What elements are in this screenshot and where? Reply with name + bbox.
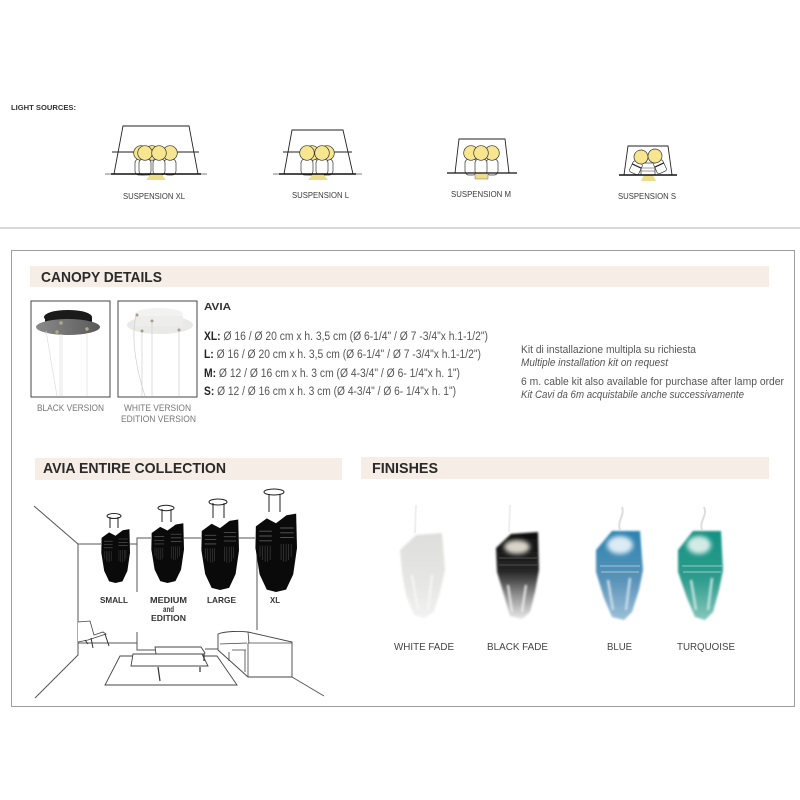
photo: white canopy xyxy=(118,301,197,397)
heading: avia entire collection: AVIA ENTIRE COLLECTION xyxy=(43,460,226,477)
text: installation kit notes xyxy=(521,344,784,401)
text: installation kit notes: Kit di installazione multipla su richiesta xyxy=(521,344,697,356)
photo: black canopy xyxy=(31,301,110,397)
panel: product details xyxy=(12,250,794,706)
icon: suspension XL xyxy=(105,126,207,180)
icon: suspension S xyxy=(619,146,677,181)
heading: finishes xyxy=(361,457,769,479)
text: avia dimensions: AVIA xyxy=(204,301,231,313)
caption: white and edition version: WHITE VERSION xyxy=(124,403,191,413)
label: black fade: BLACK FADE xyxy=(487,641,548,653)
finish: white fade xyxy=(400,505,445,618)
chandelier: XL xyxy=(255,489,297,592)
room outline xyxy=(34,506,324,698)
illustration: room with collection xyxy=(34,489,324,698)
text: installation kit notes: Kit Cavi da 6m acquistabile anche successivamente xyxy=(521,389,744,401)
text: avia dimensions: XL: Ø 16 / Ø 20 cm x h. 3,5 cm (Ø 6-1/4" / Ø 7 -3/4"x h.1-1/2") xyxy=(204,331,488,343)
chandelier: medium xyxy=(151,505,184,583)
label: light sources: LIGHT SOURCES: xyxy=(11,105,76,112)
label: large: LARGE xyxy=(207,595,236,605)
label: medium and edition: EDITION xyxy=(151,613,186,623)
icon: suspension L xyxy=(273,130,362,180)
label: medium and edition: MEDIUM xyxy=(150,595,187,605)
label: medium and edition: and xyxy=(163,604,174,614)
heading: finishes: FINISHES xyxy=(372,460,438,477)
label: blue: BLUE xyxy=(607,641,632,653)
text: avia dimensions: S: Ø 12 / Ø 16 cm x h. 3 cm (Ø 4-3/4" / Ø 6- 1/4"x h. 1") xyxy=(204,386,456,398)
text: avia dimensions: M: Ø 12 / Ø 16 cm x h. 3 cm (Ø 4-3/4" / Ø 6- 1/4"x h. 1") xyxy=(204,368,460,380)
heading: canopy details: CANOPY DETAILS xyxy=(41,269,162,286)
label: small: SMALL xyxy=(100,595,128,605)
chandelier: small xyxy=(101,514,130,583)
label: suspension M: SUSPENSION M xyxy=(451,190,511,199)
label: turquoise: TURQUOISE xyxy=(677,641,735,653)
label: xl: XL xyxy=(270,595,280,605)
furniture: armchair xyxy=(78,621,109,648)
label: suspension L: SUSPENSION L xyxy=(292,191,350,200)
text: installation kit notes: Multiple installation kit on request xyxy=(521,357,669,369)
caption: black version: BLACK VERSION xyxy=(37,403,104,413)
text: avia dimensions xyxy=(204,301,488,398)
furniture: sofa xyxy=(218,631,292,677)
label: suspension XL: SUSPENSION XL xyxy=(123,192,186,201)
finish: turquoise xyxy=(678,507,723,620)
text: installation kit notes: 6 m. cable kit also available for purchase after lamp order xyxy=(521,376,784,388)
chandelier: large xyxy=(201,499,239,590)
label: medium and edition xyxy=(150,595,187,623)
furniture: rug and tables xyxy=(105,647,237,685)
caption: white and edition version xyxy=(121,403,196,424)
icon: suspension M xyxy=(447,139,517,179)
heading: canopy details xyxy=(30,266,769,287)
text: avia dimensions: L: Ø 16 / Ø 20 cm x h. 3,5 cm (Ø 6-1/4" / Ø 7 -3/4"x h.1-1/2") xyxy=(204,349,481,361)
label: suspension S: SUSPENSION S xyxy=(618,192,676,201)
label: white fade: WHITE FADE xyxy=(394,641,454,653)
caption: white and edition version: EDITION VERSION xyxy=(121,414,196,424)
finish: black fade xyxy=(496,505,539,619)
finish: blue xyxy=(596,507,643,620)
heading: avia entire collection xyxy=(35,458,342,480)
